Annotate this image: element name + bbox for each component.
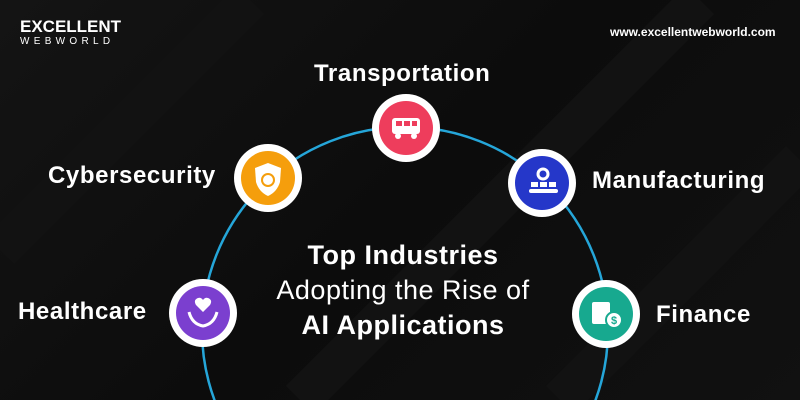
- logo: [20, 17, 121, 47]
- icon: manufacturing: [508, 149, 576, 217]
- label: Manufacturing: Manufacturing: [592, 167, 765, 194]
- title: AI Applications: [301, 310, 504, 340]
- logo: EXCELLENT: [20, 17, 121, 36]
- label: Transportation: Transportation: [314, 60, 490, 87]
- icon: transportation bus: [372, 94, 440, 162]
- title: Adopting the Rise of: [276, 275, 530, 305]
- icon: finance: $: [611, 315, 617, 327]
- icon: healthcare: [169, 279, 237, 347]
- website url: www.excellentwebworld.com: [610, 25, 776, 39]
- label: Cybersecurity: Cybersecurity: [48, 162, 216, 189]
- title: [276, 240, 530, 340]
- label: Finance: Finance: [656, 301, 751, 328]
- title: Top Industries: [307, 240, 498, 270]
- icon: cybersecurity shield: [234, 144, 302, 212]
- label: Healthcare: Healthcare: [18, 298, 147, 325]
- icon: finance: [572, 280, 640, 348]
- logo: WEBWORLD: [20, 36, 114, 47]
